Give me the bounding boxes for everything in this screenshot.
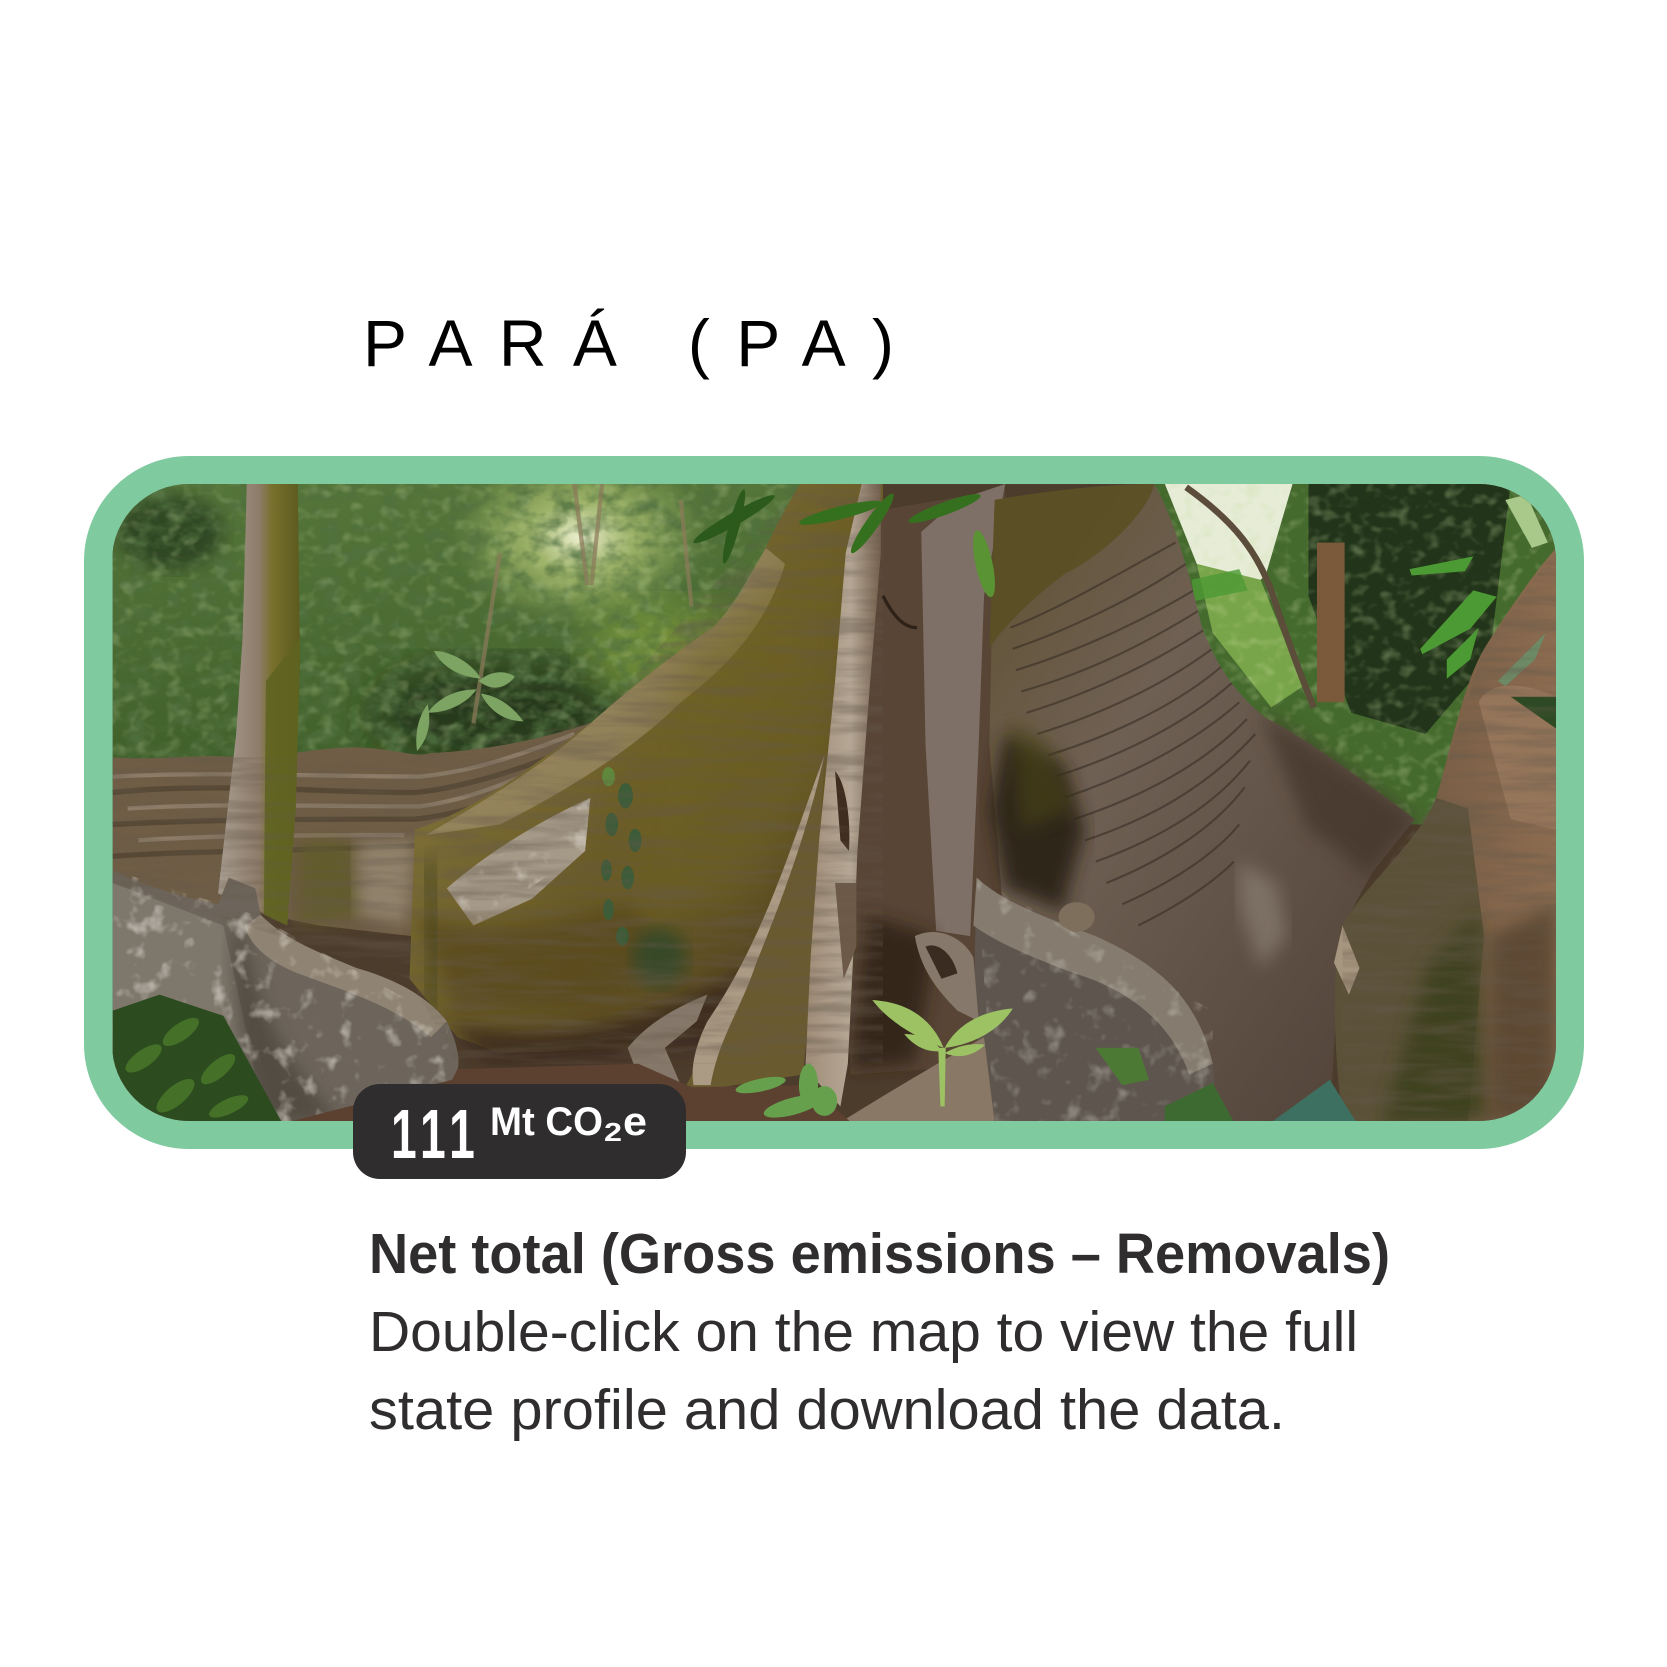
photo: rainforest kapok tree — [113, 447, 1558, 1122]
body line 1: Double-click on the map to view the full — [369, 1300, 1358, 1364]
front grey wall root on the left — [113, 870, 459, 1122]
base fill — [113, 484, 1557, 1122]
canopy leaves over the trunk — [690, 488, 999, 599]
vine on the buttress — [601, 767, 687, 987]
description text — [369, 1222, 1390, 1442]
undergrowth plants — [113, 995, 1356, 1122]
thin pale tree in the centre — [805, 484, 881, 1106]
title: PARÁ (PA) — [363, 306, 894, 380]
unit: 2 — [604, 1117, 622, 1147]
unit: Mt CO — [490, 1100, 603, 1144]
forest background — [112, 484, 800, 782]
value badge — [353, 1084, 686, 1179]
bold heading: Net total (Gross emissions – Removals) — [369, 1222, 1390, 1286]
main mossy buttress — [410, 484, 883, 1064]
left slender mossy tree — [218, 484, 300, 926]
front grey root on the right — [840, 878, 1214, 1122]
palm in the clearing — [416, 651, 523, 751]
photo frame — [84, 456, 1584, 1149]
slender buttress left of the tree — [628, 755, 824, 1090]
body line 2: state profile and download the data. — [369, 1378, 1285, 1442]
forest on the right — [1154, 484, 1558, 824]
forest floor — [287, 1064, 851, 1122]
low buttress wall on the left — [112, 723, 590, 936]
large right buttress — [989, 484, 1415, 1122]
central shadowed trunk — [840, 484, 1005, 1074]
value number: 111 — [391, 1094, 475, 1173]
unit: e — [623, 1100, 647, 1144]
far right root — [1334, 548, 1556, 1122]
bark texture — [113, 484, 1556, 1122]
